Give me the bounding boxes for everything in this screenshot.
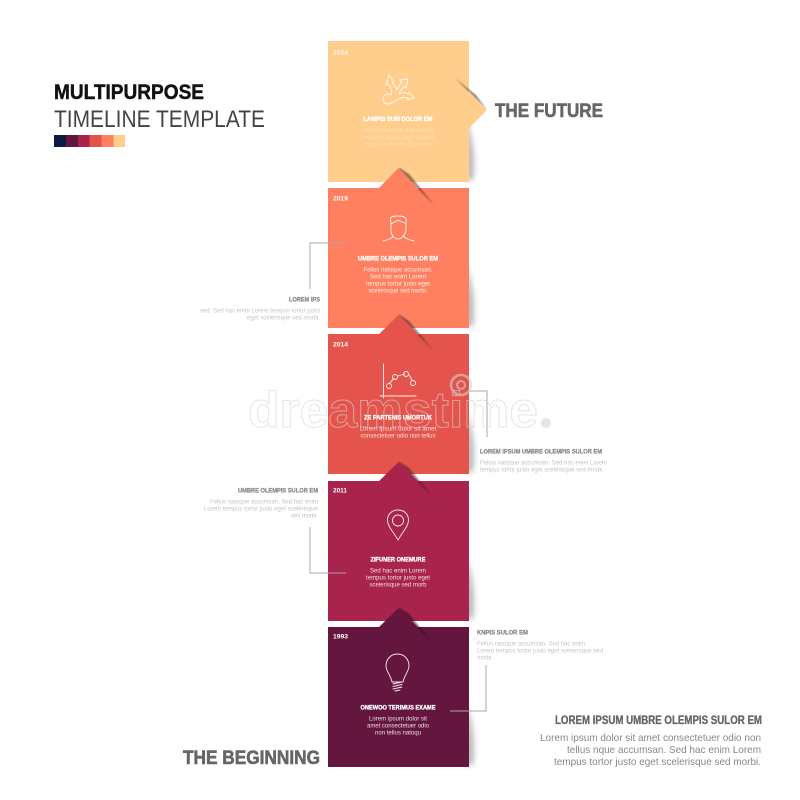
panel title: UMBRE OLEMPIS SULOR EM [358,256,438,262]
callout: lorem ips: LOREM IPS [289,296,321,304]
callout: lorem ipsum umbre: tempus tortor justo eget scelerisque sed morbi. [480,466,604,474]
body text: tincidunt auras sem magna [362,134,434,141]
year: 2011 [333,488,347,494]
callout: lorem ips: eget scelerisque sed morbi. [247,314,320,322]
watermark: dreamstime [248,382,538,438]
callout: lorem ipsum umbre: LOREM IPSUM UMBRE OLEMPIS SULOR EM [480,448,602,456]
heading: timeline template: TIMELINE TEMPLATE [54,106,265,133]
arrow: up pointing [378,168,419,189]
icon: line chart [380,364,416,398]
year: 1993 [333,634,348,640]
callout: knpis: Fellus natoque accumsan. Sed hac enim [477,640,585,648]
callout: umbre olempis: Fellus natoque accumsan. Sed hac enim [210,498,318,506]
panel title: LAMPIS SUM DOLOR EM [364,116,433,123]
icon: person head [383,216,414,241]
icon: branching arrows [383,75,414,104]
panel: 2024 future [328,41,487,182]
text block: bottom right summary [540,715,762,768]
body text: tempus tortor justo eget [366,280,430,288]
body text: Hiexenca sena dipiaticitsit [363,127,433,134]
callout: knpis: morbi. [477,654,493,662]
arrow: up pointing [378,462,419,482]
body text: Sed hac enim Lorem [370,274,426,280]
icon: map pin [388,510,408,540]
callout: knpis: Lorem tempus tortor justo eget scelerisque sed [477,648,603,654]
arrow shadow [398,462,433,497]
arrow: right pointing [466,91,487,131]
body text: Fellus natoque accumsan. [364,266,433,274]
heading: the future: THE FUTURE [495,101,603,122]
arrow shadow [398,608,432,642]
year: 2014 [333,342,348,348]
arrow shadow [398,168,434,205]
title block [54,81,265,147]
callout: umbre olempis: sed morbi. [291,512,318,520]
text block: bottom right summary: tempus tortor justo eget scelerisque sed morbi. [554,757,761,768]
arrow shadow: right [455,78,487,110]
panel title: ONEWOO TERIMUS EXAME [360,704,436,712]
body text: amet consectetuer odio [367,722,429,730]
body text [362,127,434,148]
callout: umbre olempis: UMBRE OLEMPIS SULOR EM [238,488,318,494]
body text: tempus tortor justo eget [366,574,430,582]
text block: bottom right summary: LOREM IPSUM UMBRE OLEMPIS SULOR EM [555,715,762,727]
body text [367,716,429,736]
callout: umbre olempis: Lorem tempus tortor justo eget scelerisque [204,506,318,512]
body text: Sed hac enim Lorem [370,568,426,574]
year: 2024 [333,50,348,56]
callout: knpis: KNPIS SULOR EM [477,630,528,636]
callout: lorem ipsum umbre: Fellus natoque accumsan. Sed hac enim Lorem [480,460,607,466]
body text: Lorem ipsum dolor sit [369,716,427,722]
arrow: up pointing [378,608,419,628]
body text [360,426,437,440]
body text: scelerisque sed morb [370,582,427,588]
body text: consectetuer odio non tellus [360,432,436,440]
year: 2019 [333,196,348,202]
text block: bottom right summary: tellus nque accumsan. Sed hac enim Lorem [567,745,761,756]
body text: Nam fermenti vitae tatin [365,141,431,148]
arrow: up pointing [378,315,419,335]
icon: light bulb [386,654,409,691]
callout: lorem ips: sed. Sed hac enim Lorem tempus tortor justo [200,308,320,314]
panel: 2014 [328,315,469,474]
arrow shadow [398,315,434,351]
panel: 2019 [328,168,469,328]
heading: the beginning: THE BEGINNING [183,748,320,769]
body text: non tellus natoqu [375,730,421,736]
callout: lorem ipsum umbre [469,391,607,474]
panel: 1993 beginning [328,608,469,767]
body text [364,266,433,294]
callout: umbre olempis [204,488,346,573]
panel title: ZIFUNER ONEMURE [370,556,426,564]
panel title: ZE PARTENIS UMORTUK [364,414,432,422]
callout: lorem ips [200,243,346,322]
heading: multipurpose: MULTIPURPOSE [54,81,204,104]
body text: Lorem ipsum dolor sit amet [360,426,437,432]
callout: knpis [450,630,603,711]
panel: 2011 [328,462,469,621]
body text: scelerisque sed morbi. [368,288,428,294]
body text [366,568,430,588]
colour palette swatches [54,135,125,147]
right edge page-curl shadows [466,118,474,765]
text block: bottom right summary: Lorem ipsum dolor sit amet consectetuer odio non [540,733,761,744]
